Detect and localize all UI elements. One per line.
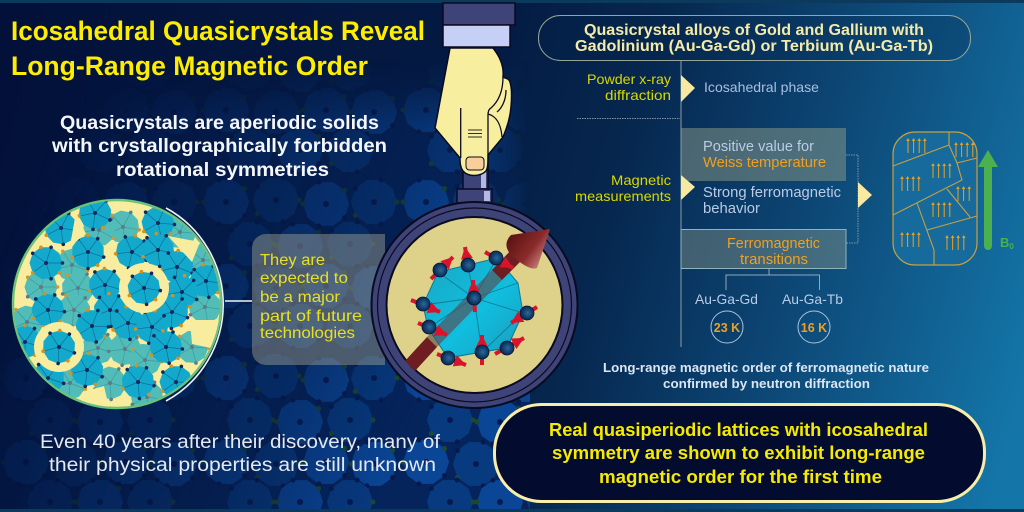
panel: ferromagnetic transitions: transitions — [740, 252, 808, 268]
row: powder x-ray diffraction: Powder x-ray — [587, 71, 671, 87]
transition temperatures tree — [695, 269, 843, 343]
text: still unknown properties: Even 40 years after their discovery, many of — [40, 432, 441, 453]
callout: future technologies: be a major — [260, 289, 341, 306]
panel: alloy pill heading — [538, 16, 970, 60]
large magnetization arrow — [405, 229, 550, 371]
icon: hand holding magnifier — [435, 3, 515, 203]
panel: ferromagnetic transitions — [681, 230, 846, 268]
title: Icosahedral Quasicrystals Reveal — [11, 16, 425, 46]
row: magnetic measurements: Magnetic — [611, 172, 671, 188]
subheading: definition of quasicrystals — [51, 112, 387, 181]
text: strong ferromagnetic behavior: behavior — [703, 201, 760, 217]
background quasicrystal pattern — [0, 76, 530, 509]
Au-Ga-Tb value: 16 K — [801, 321, 827, 335]
bracket: results to domain diagram — [846, 155, 858, 243]
text: neutron diffraction confirmation: Long-range magnetic order of ferromagnetic nature — [603, 360, 929, 375]
text: still unknown properties — [40, 432, 441, 476]
Au-Ga-Tb value — [782, 291, 843, 343]
Au-Ga-Gd value: 23 K — [714, 321, 740, 335]
magnifying glass — [370, 201, 578, 409]
arrow: magnetic field B0 — [978, 150, 1014, 251]
subheading: definition of quasicrystals: with crystallographically forbidden — [51, 135, 387, 157]
arrow: magnetic measurements — [681, 175, 695, 200]
arrow: magnetic field B0: 0 — [1009, 242, 1014, 251]
row: powder x-ray diffraction — [587, 71, 819, 103]
panel: conclusion: magnetic order for the first time — [599, 467, 882, 487]
text: neutron diffraction confirmation — [603, 360, 929, 391]
panel: ferromagnetic transitions: Ferromagnetic — [727, 236, 820, 252]
subheading: definition of quasicrystals: rotational symmetries — [116, 159, 329, 181]
panel: conclusion: symmetry are shown to exhibit long-range — [552, 443, 925, 463]
panel: alloy pill heading: Quasicrystal alloys of Gold and Gallium with — [584, 22, 924, 39]
subheading: definition of quasicrystals: Quasicrystals are aperiodic solids — [60, 112, 379, 134]
arrow: to domain diagram — [858, 182, 872, 208]
arrow: magnetic field B0: B — [1000, 235, 1009, 250]
text: strong ferromagnetic behavior — [703, 185, 841, 217]
callout: future technologies: part of future — [260, 308, 362, 325]
row: powder x-ray diffraction: diffraction — [605, 87, 671, 103]
row: powder x-ray diffraction: Icosahedral phase — [704, 79, 819, 95]
panel: conclusion: Real quasiperiodic lattices with icosahedral — [549, 420, 928, 440]
panel: Weiss temperature: Weiss temperature — [703, 155, 826, 171]
row: magnetic measurements: measurements — [575, 188, 671, 204]
quasicrystal lattice disc — [12, 198, 222, 410]
panel: conclusion — [494, 404, 984, 502]
callout: future technologies: expected to — [260, 270, 348, 287]
text: neutron diffraction confirmation: confirmed by neutron diffraction — [663, 376, 870, 391]
row: magnetic measurements — [575, 172, 671, 204]
callout: future technologies — [252, 234, 385, 365]
vertical flow line and dotted divider — [680, 60, 682, 347]
icosahedron with magnetic moments — [405, 229, 550, 371]
text: still unknown properties: their physical properties are still unknown — [49, 455, 436, 476]
bracket arc and connector to callout — [166, 208, 252, 401]
panel: alloy pill heading: Gadolinium (Au-Ga-Gd) or Terbium (Au-Ga-Tb) — [575, 38, 933, 55]
Au-Ga-Gd value — [695, 291, 758, 343]
Au-Ga-Gd value: Au-Ga-Gd — [695, 291, 758, 307]
title: Long-Range Magnetic Order — [11, 51, 368, 81]
title — [11, 16, 425, 81]
panel: Weiss temperature: Positive value for — [703, 139, 814, 155]
callout: future technologies: They are — [260, 252, 325, 269]
diagram: aligned magnetic domains — [893, 132, 977, 265]
panel: Weiss temperature — [681, 128, 846, 181]
Au-Ga-Tb value: Au-Ga-Tb — [782, 291, 843, 307]
text: strong ferromagnetic behavior: Strong ferromagnetic — [703, 185, 841, 201]
atoms and spin arrows — [411, 247, 537, 365]
callout: future technologies: technologies — [260, 325, 355, 342]
